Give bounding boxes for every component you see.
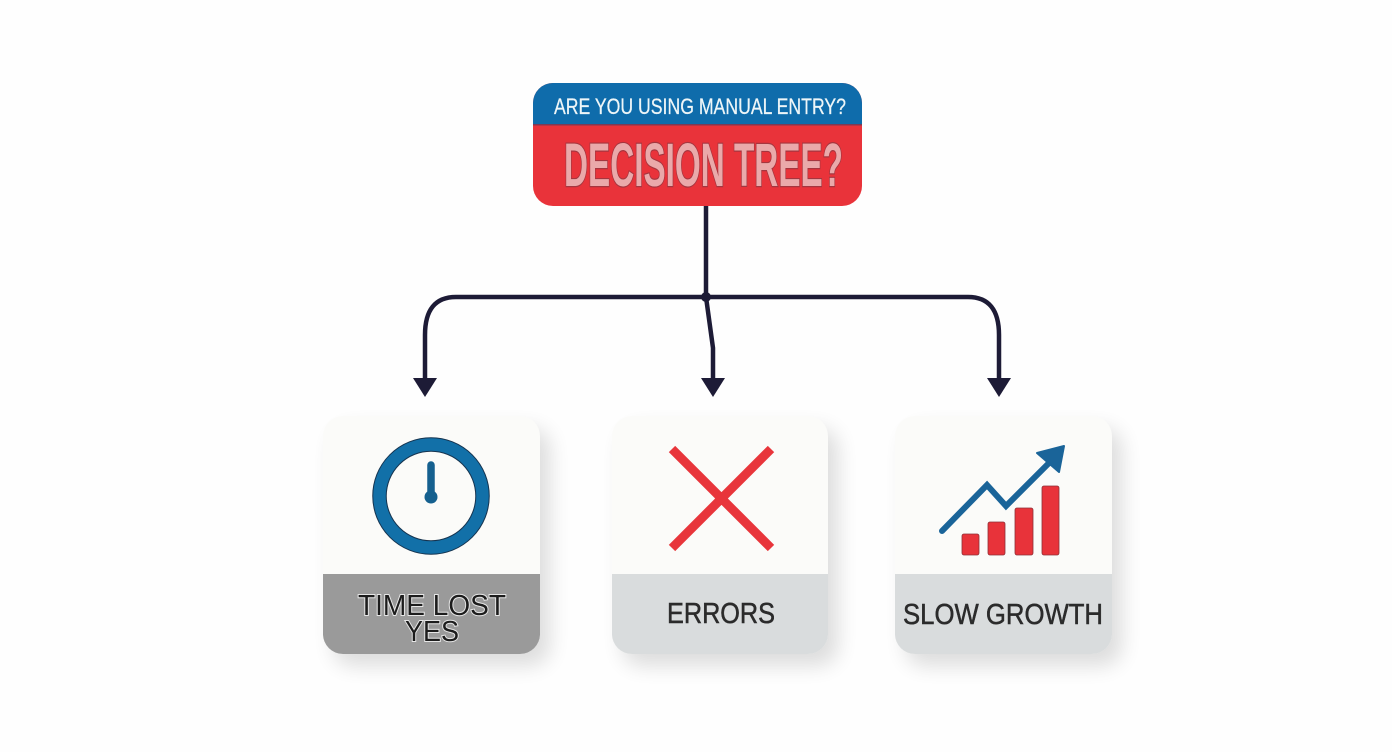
- question text: ARE YOU USING MANUAL ENTRY?: [554, 94, 846, 119]
- arrowhead: left: [413, 378, 437, 397]
- icon: red cross: [672, 449, 771, 548]
- card: slow growth: [895, 416, 1122, 666]
- icon: clock: [380, 444, 482, 548]
- arrowhead: right: [987, 378, 1011, 397]
- label: yes: YES: [405, 616, 459, 648]
- label: slow growth: SLOW GROWTH: [903, 599, 1103, 631]
- card: errors: [612, 416, 838, 666]
- arrowhead: center: [701, 378, 725, 397]
- icon: growth chart: [942, 446, 1064, 555]
- title box: decision tree header: [533, 83, 862, 206]
- card: time lost: [323, 416, 550, 666]
- label: time lost: TIME LOST: [358, 590, 506, 622]
- label: errors: ERRORS: [667, 598, 775, 630]
- title text: DECISION TREE?: [564, 131, 843, 199]
- connector arrows: [413, 206, 1011, 397]
